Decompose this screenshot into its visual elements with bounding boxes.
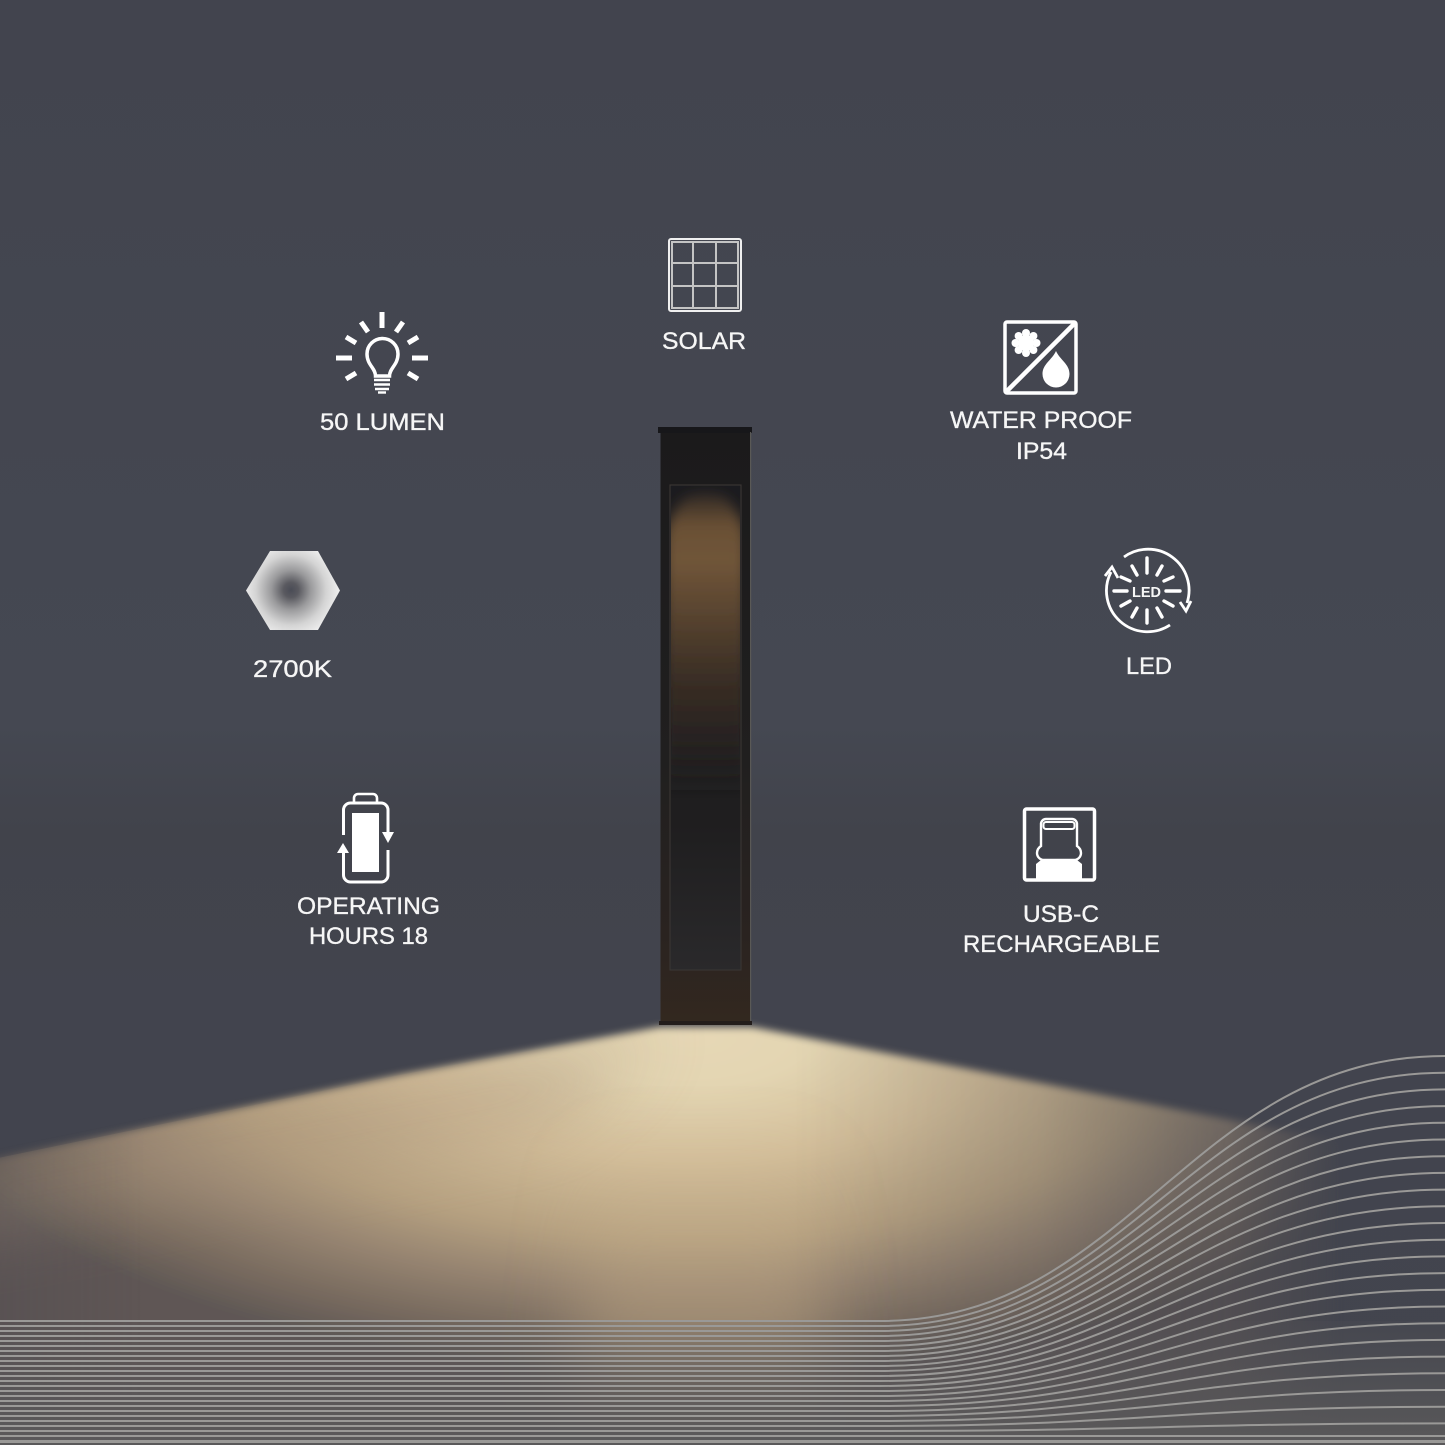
feature: 2700K: [246, 551, 340, 683]
label: 50 lumen: 50 LUMEN: [320, 409, 445, 436]
label: operating: OPERATING: [297, 893, 440, 920]
feature: operating hours: [297, 794, 440, 950]
feature: USB-C rechargeable: [963, 809, 1160, 958]
feature: LED: [1105, 549, 1191, 680]
bollard light post: [658, 427, 752, 1025]
feature: 50 lumen: [320, 312, 445, 436]
label: solar: SOLAR: [662, 328, 746, 355]
wave line pattern: [0, 1056, 1445, 1442]
icon: solar panel: [669, 239, 741, 311]
icon: hexagon colour temperature: [246, 551, 340, 630]
feature: solar: [662, 239, 746, 355]
label: water proof: WATER PROOF: [950, 407, 1132, 434]
icon: battery cycle: [337, 794, 394, 882]
label: 2700K: 2700K: [253, 656, 333, 683]
icon: USB-C connector: [1024, 809, 1094, 880]
label: USB-C: USB-C: [1023, 901, 1099, 928]
feature: water proof: [950, 322, 1132, 465]
light pool on the ground: [0, 1027, 1445, 1445]
label: rechargeable: RECHARGEABLE: [963, 931, 1160, 958]
label: IP54: IP54: [1016, 438, 1067, 465]
icon: flower and water drop square: [1005, 322, 1076, 393]
icon: light bulb: [336, 312, 428, 392]
label: LED: LED: [1126, 653, 1172, 680]
label: hours 18: HOURS 18: [309, 923, 428, 950]
icon: LED cycle: LED: [1132, 584, 1161, 601]
